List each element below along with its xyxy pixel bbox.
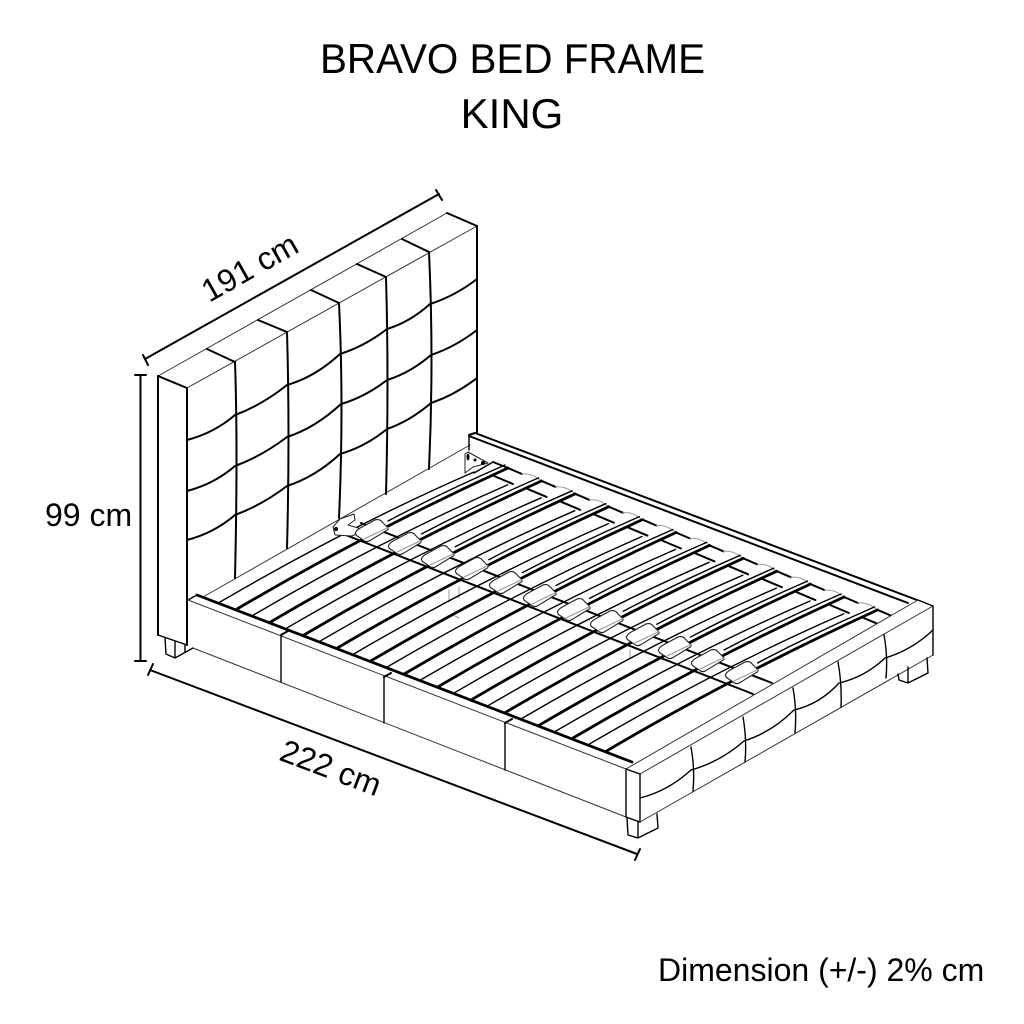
side rail bbox=[626, 600, 933, 822]
dimension: length: 222 cm bbox=[275, 732, 386, 803]
dimension: height bbox=[45, 375, 146, 661]
feet bbox=[165, 638, 928, 838]
foot: front corner bbox=[627, 814, 658, 838]
title: BRAVO BED FRAME bbox=[320, 35, 705, 82]
slats bbox=[220, 465, 892, 751]
centre support beam bbox=[338, 523, 772, 694]
bracket: centre beam bbox=[333, 514, 365, 536]
dimension: length bbox=[148, 664, 640, 860]
headboard bbox=[158, 213, 477, 645]
dimension: headboard width: 191 cm bbox=[195, 226, 304, 309]
headboard top and side faces bbox=[158, 213, 477, 597]
foot: right bbox=[898, 658, 928, 683]
dimension: headboard width bbox=[143, 190, 442, 365]
first slat edge bbox=[474, 462, 493, 473]
slat cuffs on centre beam bbox=[355, 520, 758, 684]
vertical tufting seams bbox=[235, 252, 432, 578]
bracket: back right bbox=[465, 452, 488, 473]
horizontal tufting seams bbox=[187, 279, 477, 440]
support legs under slats bbox=[449, 587, 630, 657]
side rail tufting bbox=[691, 635, 887, 791]
title bbox=[320, 35, 705, 137]
foot: left bbox=[165, 638, 193, 658]
dimension: height: 99 cm bbox=[45, 497, 132, 533]
foot rail bbox=[187, 595, 632, 817]
back rail bbox=[469, 433, 917, 603]
title: KING bbox=[461, 90, 563, 137]
tolerance note: Dimension (+/-) 2% cm bbox=[658, 952, 984, 988]
